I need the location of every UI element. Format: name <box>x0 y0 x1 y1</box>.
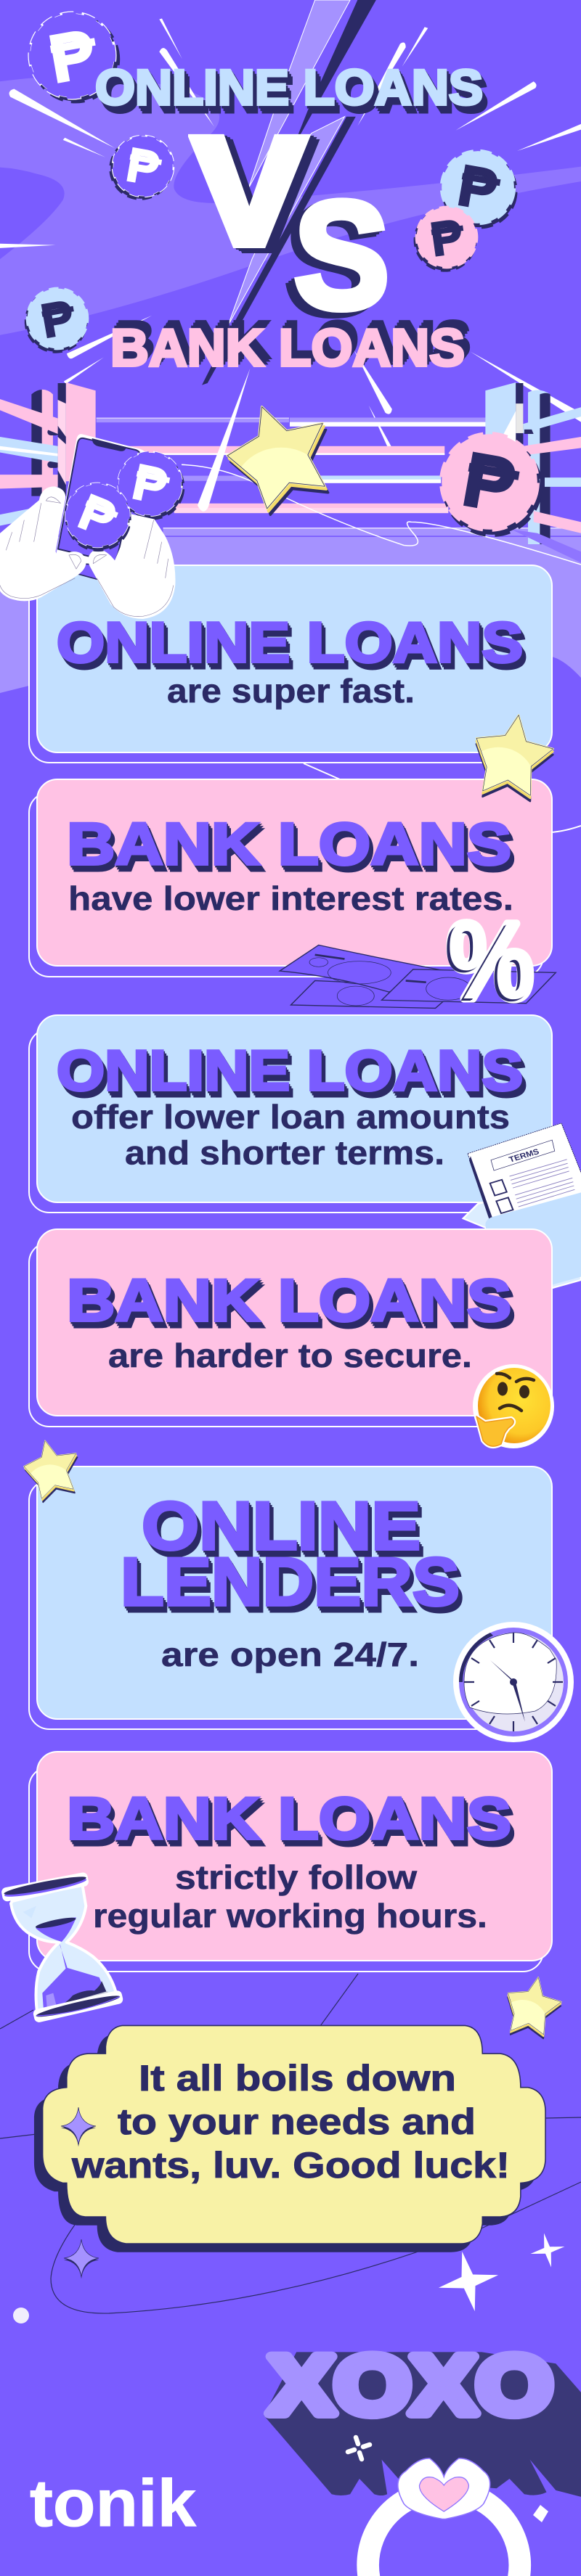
xoxo extrude <box>264 2352 581 2497</box>
star: card 1 corner <box>445 702 564 834</box>
coin: upper left small: P <box>123 138 163 195</box>
card 5 heading: ONLINE <box>142 1488 420 1564</box>
card 1 back outline <box>29 581 543 763</box>
thin line between cards <box>304 763 340 779</box>
card 3 subtext: and shorter terms. <box>125 1133 444 1171</box>
white dot <box>13 2308 29 2323</box>
title: bank loans: BANK LOANS <box>110 319 465 377</box>
card 1 heading: ONLINE LOANS <box>57 610 523 674</box>
left hand <box>0 488 85 600</box>
card 2 back outline <box>29 792 543 977</box>
right hand <box>89 515 174 618</box>
card 5 heading: LENDERS <box>121 1543 460 1620</box>
wavy white line <box>182 464 581 565</box>
coin: phone upper <box>113 446 190 525</box>
icon: hourglass <box>1 1871 124 2023</box>
lightning bolt <box>202 0 376 385</box>
banner body <box>43 2025 545 2244</box>
title: S: S <box>294 170 389 340</box>
card 2: bank loans have lower interest rates <box>37 779 552 966</box>
hourglass top cap <box>1 1871 89 1902</box>
hands <box>398 2458 490 2519</box>
card 4 heading: BANK LOANS <box>67 1268 511 1334</box>
card 6 subtext: regular working hours. <box>93 1897 487 1935</box>
coin: upper left small <box>106 131 178 204</box>
coin: right pink <box>411 203 481 274</box>
hands holding phone <box>0 434 190 618</box>
star: card 5 corner <box>19 1439 81 1518</box>
closing message: It all boils down <box>139 2058 456 2099</box>
card 4 back outline <box>29 1242 543 1427</box>
card 3 heading: ONLINE LOANS <box>57 1038 523 1102</box>
coin: phone lower <box>55 475 140 559</box>
money bills <box>280 945 556 1008</box>
coin: right pink: P <box>427 209 466 266</box>
arena floor <box>0 537 581 697</box>
closing message: wants, luv. Good luck! <box>71 2145 510 2186</box>
card 5 back outline <box>29 1480 543 1729</box>
sparkle: banner <box>61 2107 96 2146</box>
title: V: V <box>194 107 304 276</box>
sparkle: white small <box>527 2230 568 2271</box>
right ring post <box>485 382 581 563</box>
percent sign: % <box>447 900 533 1022</box>
coin: phone upper: P <box>128 454 172 514</box>
closing banner <box>34 2025 545 2252</box>
coin: lower left blue: P <box>37 290 78 348</box>
card 3: online loans offer lower loan amounts <box>37 1015 552 1202</box>
card 3 back outline <box>29 1029 543 1213</box>
card 4: bank loans are harder to secure <box>37 1229 552 1416</box>
card 6: bank loans strictly follow regular working hours <box>37 1752 552 1961</box>
coin: right blue: P <box>454 153 502 222</box>
star: bottom right <box>484 1968 569 2061</box>
ring ropes <box>97 418 581 536</box>
banner shadow <box>34 2034 537 2252</box>
tonik logo: tonik <box>30 2466 197 2540</box>
sparkle: small diamond <box>533 2505 548 2522</box>
terms sheet <box>468 1123 581 1222</box>
card 1 subtext: are super fast. <box>167 672 415 710</box>
closing message: to your needs and <box>118 2101 476 2142</box>
coin: right blue <box>435 145 522 233</box>
hand contour lines <box>0 497 174 617</box>
card 4 subtext: are harder to secure. <box>108 1337 472 1374</box>
folder with terms sheet <box>463 1123 581 1288</box>
boxing ring <box>0 369 581 565</box>
left ring post <box>0 382 96 525</box>
card 6 back outline <box>29 1767 543 1972</box>
card 2 heading: BANK LOANS <box>67 811 511 877</box>
background swoosh <box>0 76 581 335</box>
sparkle: sparkler cross <box>348 2437 370 2459</box>
sparkle: below banner <box>64 2239 99 2278</box>
heart <box>420 2477 468 2511</box>
hourglass bottom cap <box>33 1990 124 2023</box>
card 5: online lenders are open 24/7 <box>37 1467 552 1719</box>
thin background curves <box>0 1974 581 2313</box>
card 1: online loans are super fast <box>37 565 552 752</box>
card 3 subtext: offer lower loan amounts <box>71 1098 510 1136</box>
card 6 subtext: strictly follow <box>175 1858 417 1896</box>
coin: top left <box>23 6 125 109</box>
speed rays <box>0 19 581 448</box>
coin: ring corner pink: P <box>458 436 521 528</box>
coin: phone lower: P <box>72 484 123 548</box>
card 2 subtext: have lower interest rates. <box>68 879 513 917</box>
card 6 heading: BANK LOANS <box>67 1786 511 1852</box>
coin: top left: P <box>44 16 101 97</box>
title: online loans: ONLINE LOANS <box>95 60 483 115</box>
terms label: TERMS <box>508 1148 540 1165</box>
percent sign: % <box>447 900 533 1022</box>
arms <box>368 2490 520 2576</box>
star: centre of ring <box>227 407 329 536</box>
xoxo text: XOXO <box>269 2339 553 2432</box>
phone <box>56 434 146 581</box>
card 5 subtext: are open 24/7. <box>161 1636 419 1673</box>
sparkle: white large <box>432 2245 505 2318</box>
big white ray <box>198 369 250 512</box>
icon: clock <box>453 1622 574 1742</box>
icon: thinking face <box>473 1364 554 1448</box>
coin: lower left blue <box>20 284 93 356</box>
heart hands <box>368 2458 520 2576</box>
thin line right <box>552 826 581 832</box>
coin: ring corner pink <box>434 427 548 542</box>
